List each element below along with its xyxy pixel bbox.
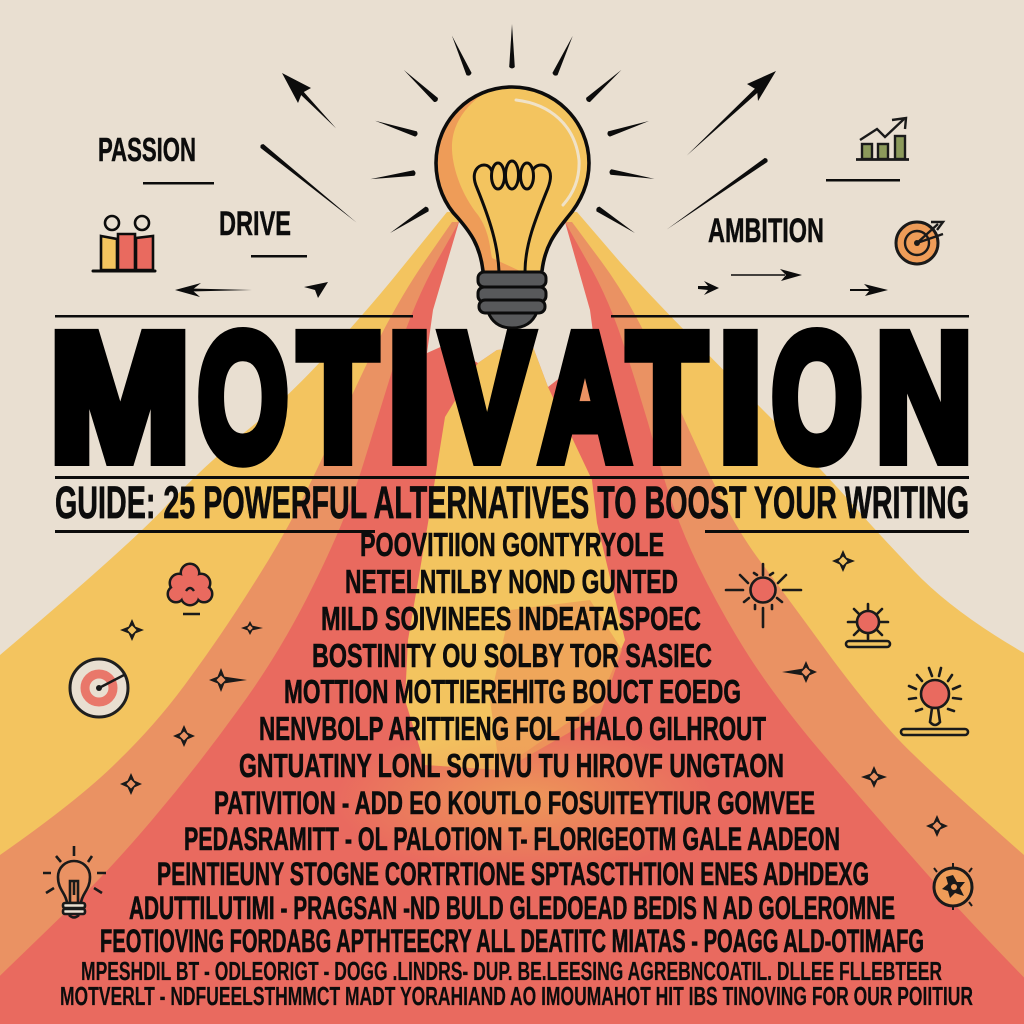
title: T [299,297,377,497]
body text list: MILD SOIVINEES INDEATASPOEC [321,600,701,637]
icon: people and bars [93,216,155,271]
top rule left [55,315,413,318]
label: drive: DRIVE [219,205,291,243]
icon: growth chart [856,118,909,160]
icon: sun on stand [901,668,968,735]
label: ambition: AMBITION [708,212,824,250]
title: I [388,297,431,497]
body text list: NENVBOLP ARITTIENG FOL THALO GILHROUT [259,710,766,747]
title: N [876,297,972,497]
label: passion [98,131,214,184]
title: A [540,297,630,497]
body text list: NETELNTILBY NOND GUNTED [345,563,678,600]
arrows: left group [175,73,358,298]
title: I [719,297,762,497]
title: V [442,297,532,497]
title: O [772,297,862,497]
icon: light bulb [436,87,589,328]
body text list [60,526,973,1011]
body text list: GNTUATINY LONL SOTIVU TU HIROVF UNGTAON [239,747,784,784]
label: passion: PASSION [98,131,196,168]
arrows: right group [666,71,888,296]
icon: sun on platform [846,604,890,647]
sparkle stars [120,550,948,837]
body text list: BOSTINITY OU SOLBY TOR SASIEC [312,637,712,674]
title: M [50,297,190,497]
top rule right [611,315,969,318]
bulb rays [370,24,655,235]
icon: bullseye [70,659,128,717]
subtitle rule right [705,530,969,533]
label: drive [219,205,307,258]
rule under title [55,476,969,479]
subtitle rule left [55,530,375,533]
icon: coral tree [169,565,211,614]
body text list: MOTTION MOTTIEREHITG BOUCT EOEDG [284,673,741,710]
chart underline [826,179,900,182]
icon: orange target [896,222,943,264]
title: O [198,297,288,497]
title: T [628,297,706,497]
icon: sun with long rays [726,564,801,627]
body text list: POOVITIION GONTYRYOLE [360,526,664,563]
icon: small light bulb [43,846,106,918]
light beams from the bulb [0,212,1024,1024]
icon: gear badge [934,863,972,910]
